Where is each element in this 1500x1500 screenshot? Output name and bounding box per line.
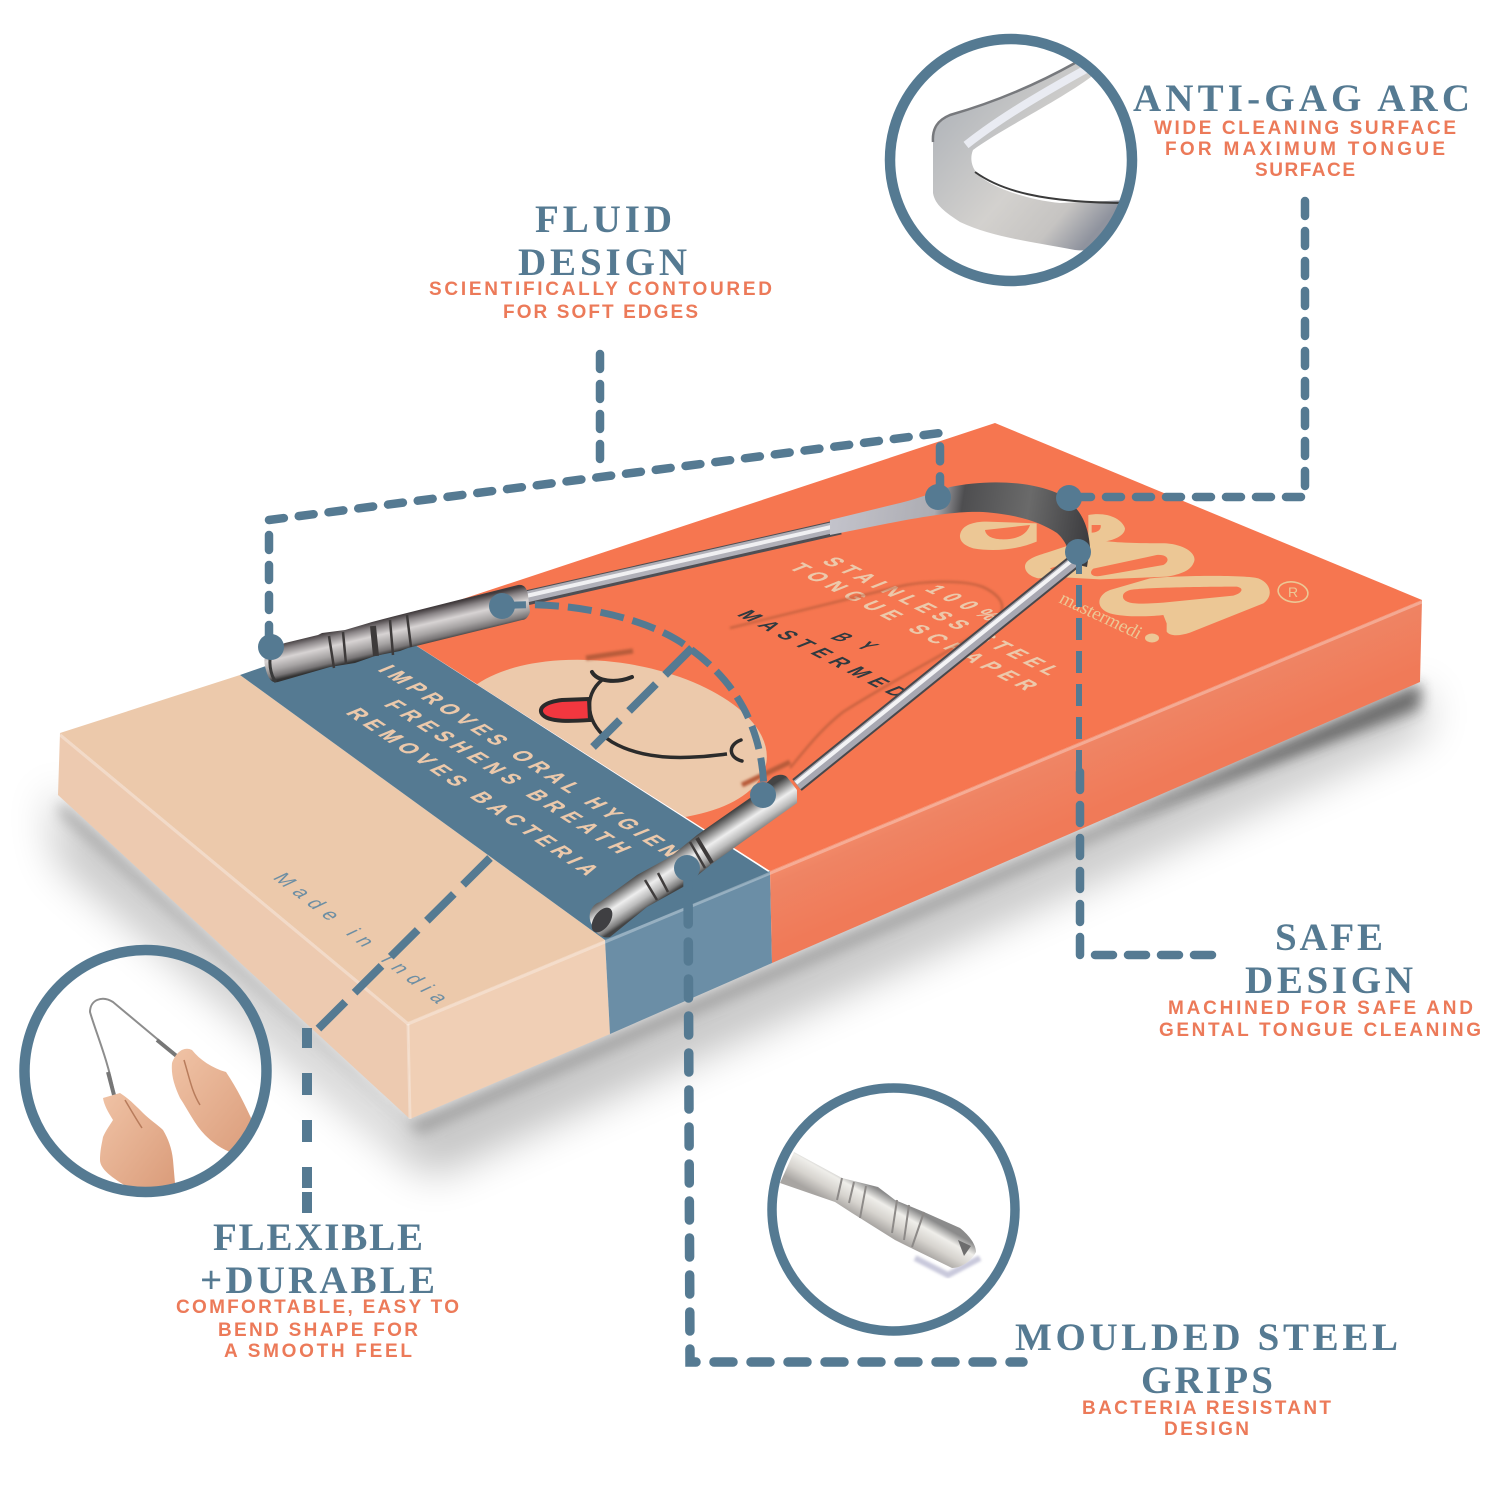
- heading: SAFE: [1275, 916, 1383, 959]
- grip body: [780, 1152, 976, 1268]
- box edge highlights: [60, 602, 1422, 1119]
- peach circle on box: [417, 646, 767, 817]
- heading: [1015, 1316, 1398, 1402]
- logo registered mark: R: [1288, 584, 1298, 600]
- upper mouth tick: [592, 672, 632, 681]
- blade close-up: [933, 55, 1130, 250]
- logo registered mark: [1276, 580, 1310, 604]
- callout: anti-gag arc: [1133, 77, 1470, 181]
- description: FOR SOFT EDGES: [503, 302, 698, 323]
- circle ring: [890, 39, 1132, 281]
- description: WIDE CLEANING SURFACE: [1154, 118, 1456, 139]
- circle: anti-gag arc detail: [890, 39, 1132, 281]
- bent scraper: [89, 998, 168, 1087]
- description: A SMOOTH FEEL: [224, 1341, 412, 1362]
- circle ring: [772, 1088, 1015, 1331]
- tongue: [541, 699, 590, 721]
- description: [176, 1297, 459, 1362]
- illustration: smiling face with tongue: [541, 672, 742, 761]
- tongue scraper: [264, 482, 1090, 938]
- connector dots: [258, 484, 1091, 881]
- description: SURFACE: [1255, 160, 1355, 181]
- connector: flexible durable: [307, 605, 764, 1213]
- scraper blade: [830, 482, 1090, 567]
- box text: product name: 100%: [919, 583, 1007, 623]
- description: MACHINED FOR SAFE AND: [1168, 998, 1473, 1019]
- heading: DESIGN: [518, 241, 687, 284]
- left handle: [264, 585, 530, 682]
- box shadow: [50, 684, 1425, 1175]
- description: DESIGN: [1164, 1419, 1249, 1440]
- heading: MOULDED STEEL: [1015, 1316, 1398, 1359]
- circle: hands bending scraper: [24, 950, 266, 1195]
- description: [1154, 118, 1456, 181]
- scraper shadow on box: [586, 582, 1002, 785]
- description: FOR MAXIMUM TONGUE: [1165, 139, 1445, 160]
- box text: product name: TONGUE SCRAPER: [783, 561, 1043, 693]
- logo squiggle: [960, 514, 1270, 635]
- box text: brand: BY: [824, 631, 883, 653]
- box right side: blue section: [605, 871, 772, 1034]
- left hand: [100, 1093, 176, 1195]
- description: SCIENTIFICALLY CONTOURED: [429, 279, 772, 300]
- box right side: peach section: [408, 940, 610, 1119]
- mouth curve: [589, 680, 727, 757]
- callout: flexible durable: [176, 1216, 459, 1362]
- box text: made in india: Made in India: [267, 870, 455, 1007]
- heading: GRIPS: [1141, 1359, 1273, 1402]
- finger creases: [125, 1060, 200, 1128]
- heading: ANTI-GAG ARC: [1133, 77, 1470, 120]
- description: BEND SHAPE FOR: [218, 1320, 418, 1341]
- right hand: [172, 1048, 251, 1152]
- circle ring: [24, 950, 266, 1192]
- heading: FLUID: [535, 198, 672, 241]
- box text: benefits: REMOVES BACTERIA: [340, 705, 605, 878]
- scraper left rod: [526, 525, 840, 598]
- description: [1082, 1398, 1331, 1440]
- connector: fluid design: [269, 354, 940, 640]
- box top: peach panel: [60, 675, 605, 1022]
- box right side: orange section: [770, 600, 1422, 963]
- box left side: [58, 733, 410, 1119]
- scraper right rod: [796, 558, 1076, 785]
- description: GENTAL TONGUE CLEANING: [1159, 1020, 1481, 1041]
- heading: [200, 1216, 435, 1302]
- heading: +DURABLE: [200, 1259, 435, 1302]
- description: [1159, 998, 1481, 1041]
- box text: benefits: FRESHENS BREATH: [378, 698, 636, 856]
- box text: benefits: IMPROVES ORAL HYGIENE: [372, 663, 702, 869]
- heading: [1245, 916, 1413, 1002]
- logo word: mastermedi: [1055, 588, 1146, 644]
- box top: orange panel: [384, 423, 1422, 871]
- circle: moulded grip detail: [772, 1088, 1015, 1331]
- callout: moulded steel grips: [1015, 1316, 1398, 1440]
- callout: fluid design: [429, 198, 772, 323]
- description: [429, 279, 772, 323]
- box top: blue band: [240, 625, 770, 940]
- right handle: [587, 775, 797, 938]
- callout: safe design: [1159, 916, 1481, 1041]
- description: COMFORTABLE, EASY TO: [176, 1297, 459, 1318]
- connector: moulded steel grips: [688, 868, 1023, 1362]
- connector: anti-gag arc: [1069, 201, 1305, 497]
- connector: safe design: [1079, 552, 1216, 955]
- description: BACTERIA RESISTANT: [1082, 1398, 1331, 1419]
- product box: [58, 423, 1422, 1119]
- heading: DESIGN: [1245, 959, 1413, 1002]
- heading: [518, 198, 687, 284]
- box text: brand: MASTERMED: [731, 608, 914, 700]
- heading: FLEXIBLE: [213, 1216, 423, 1259]
- soft shadow under grip: [915, 1258, 980, 1275]
- box text: product name: STAINLESS STEEL: [816, 555, 1067, 678]
- lower mouth tick: [731, 740, 742, 761]
